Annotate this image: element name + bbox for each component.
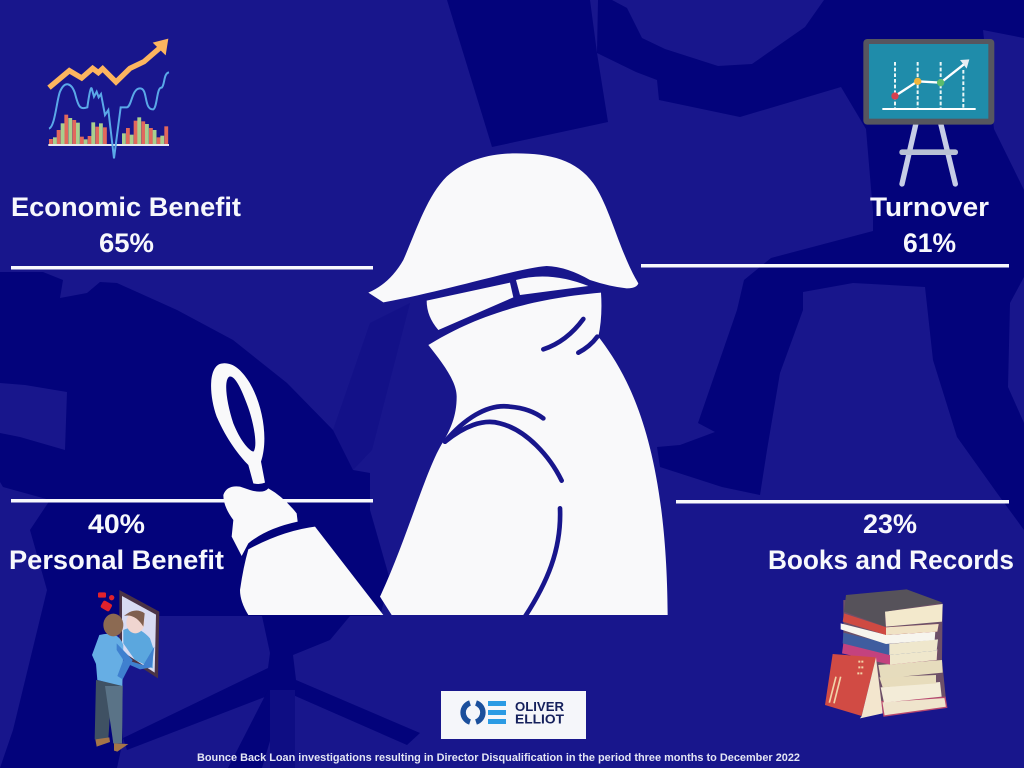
logo wordmark [515,700,564,726]
coat body [380,293,668,615]
coat fold lines [445,319,597,617]
icon: stack of books [825,589,947,718]
logo wordmark: OLIVER [515,700,564,714]
stat: personal benefit [9,509,224,575]
label: Turnover [870,192,990,222]
divider: top right [641,264,1009,268]
footer note: Bounce Back Loan investigations resulting in Director Disqualification in the period three months to December 2022 [197,752,800,764]
face band right [516,276,588,295]
logo mark [463,703,506,722]
label: Personal Benefit [9,545,224,575]
gloved hand [223,486,298,556]
value: 65% [99,228,154,258]
value: 40% [88,509,145,539]
label: Economic Benefit [11,192,241,222]
logo wordmark: ELLIOT [515,712,564,726]
divider: top left [11,266,373,270]
icon: presentation board [863,39,994,184]
icon: man looking in mirror [92,590,159,752]
value: 23% [863,509,917,539]
value: 61% [903,228,956,258]
divider: bottom right [676,500,1009,504]
hat [368,153,638,302]
face band left [427,283,513,330]
icon: market chart [48,39,169,158]
detective figure with magnifying glass [211,153,668,617]
sleeve [240,527,383,615]
stat: economic benefit [11,192,241,258]
label: Books and Records [768,545,1014,575]
magnifying glass [211,363,265,484]
stat: turnover [870,192,990,258]
logo: Oliver Elliot [441,691,586,739]
divider: bottom left [11,499,373,502]
stat: books and records [768,509,1014,575]
